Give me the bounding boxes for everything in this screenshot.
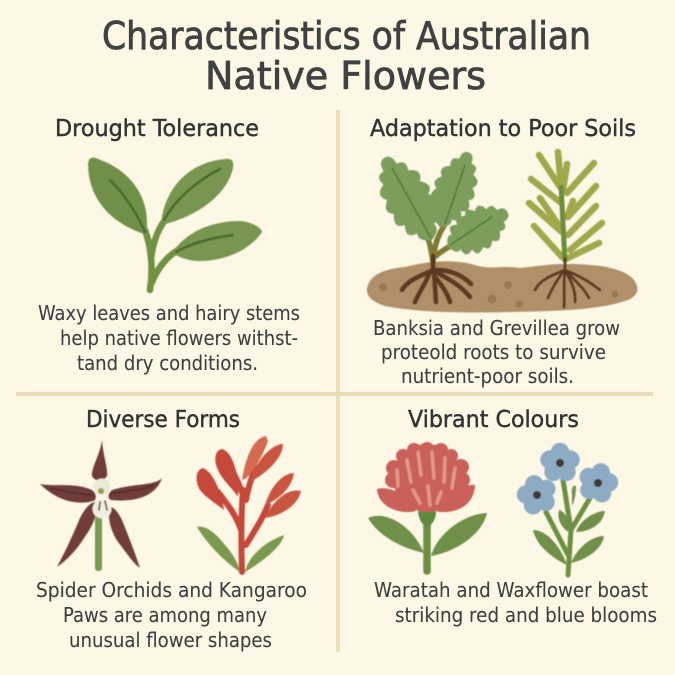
heading: adaptation to poor soils: Adaptation to Poor Soils <box>370 116 636 142</box>
icon: blue waxflowers <box>513 443 622 575</box>
panel: vibrant colours <box>368 407 657 627</box>
icon: kangaroo paw <box>197 436 301 572</box>
body text: drought tolerance <box>38 301 300 375</box>
body text: diverse forms: unusual flower shapes <box>69 628 272 652</box>
icon: banksia plant with roots <box>363 145 519 302</box>
icon: soil pebbles <box>379 281 618 308</box>
body text: diverse forms: Spider Orchids and Kangaroo <box>36 578 307 602</box>
body text: diverse forms: Paws are among many <box>63 603 267 627</box>
icon: waratah <box>368 442 487 571</box>
panel: adaptation to poor soils <box>363 116 637 388</box>
icon: spider orchid <box>40 440 162 571</box>
body text: vibrant colours: Waratah and Waxflower boast <box>374 578 648 602</box>
title: Characteristics of Australian <box>102 14 591 58</box>
panel: drought tolerance <box>38 116 300 375</box>
icon: soil mound <box>367 261 637 312</box>
body text: poor soils: proteold roots to survive <box>381 340 606 364</box>
panel: diverse forms <box>36 407 307 652</box>
body text: drought tolerance: Waxy leaves and hairy stems <box>38 301 300 325</box>
body text: poor soils: Banksia and Grevillea grow <box>373 316 620 340</box>
title: Native Flowers <box>205 54 486 98</box>
icon: three green leaves <box>88 158 262 290</box>
body text: poor soils <box>373 316 620 388</box>
heading: drought tolerance: Drought Tolerance <box>55 116 259 142</box>
heading: diverse forms: Diverse Forms <box>86 407 240 433</box>
body text: drought tolerance: tand dry conditions. <box>77 351 258 375</box>
title <box>102 14 591 98</box>
body text: diverse forms <box>36 578 307 652</box>
body text: vibrant colours <box>374 578 657 627</box>
icon: grevillea plant with roots <box>529 152 602 307</box>
heading: vibrant colours: Vibrant Colours <box>408 407 579 433</box>
body text: poor soils: nutrient-poor soils. <box>401 364 574 388</box>
body text: drought tolerance: help native flowers withst- <box>60 326 298 350</box>
